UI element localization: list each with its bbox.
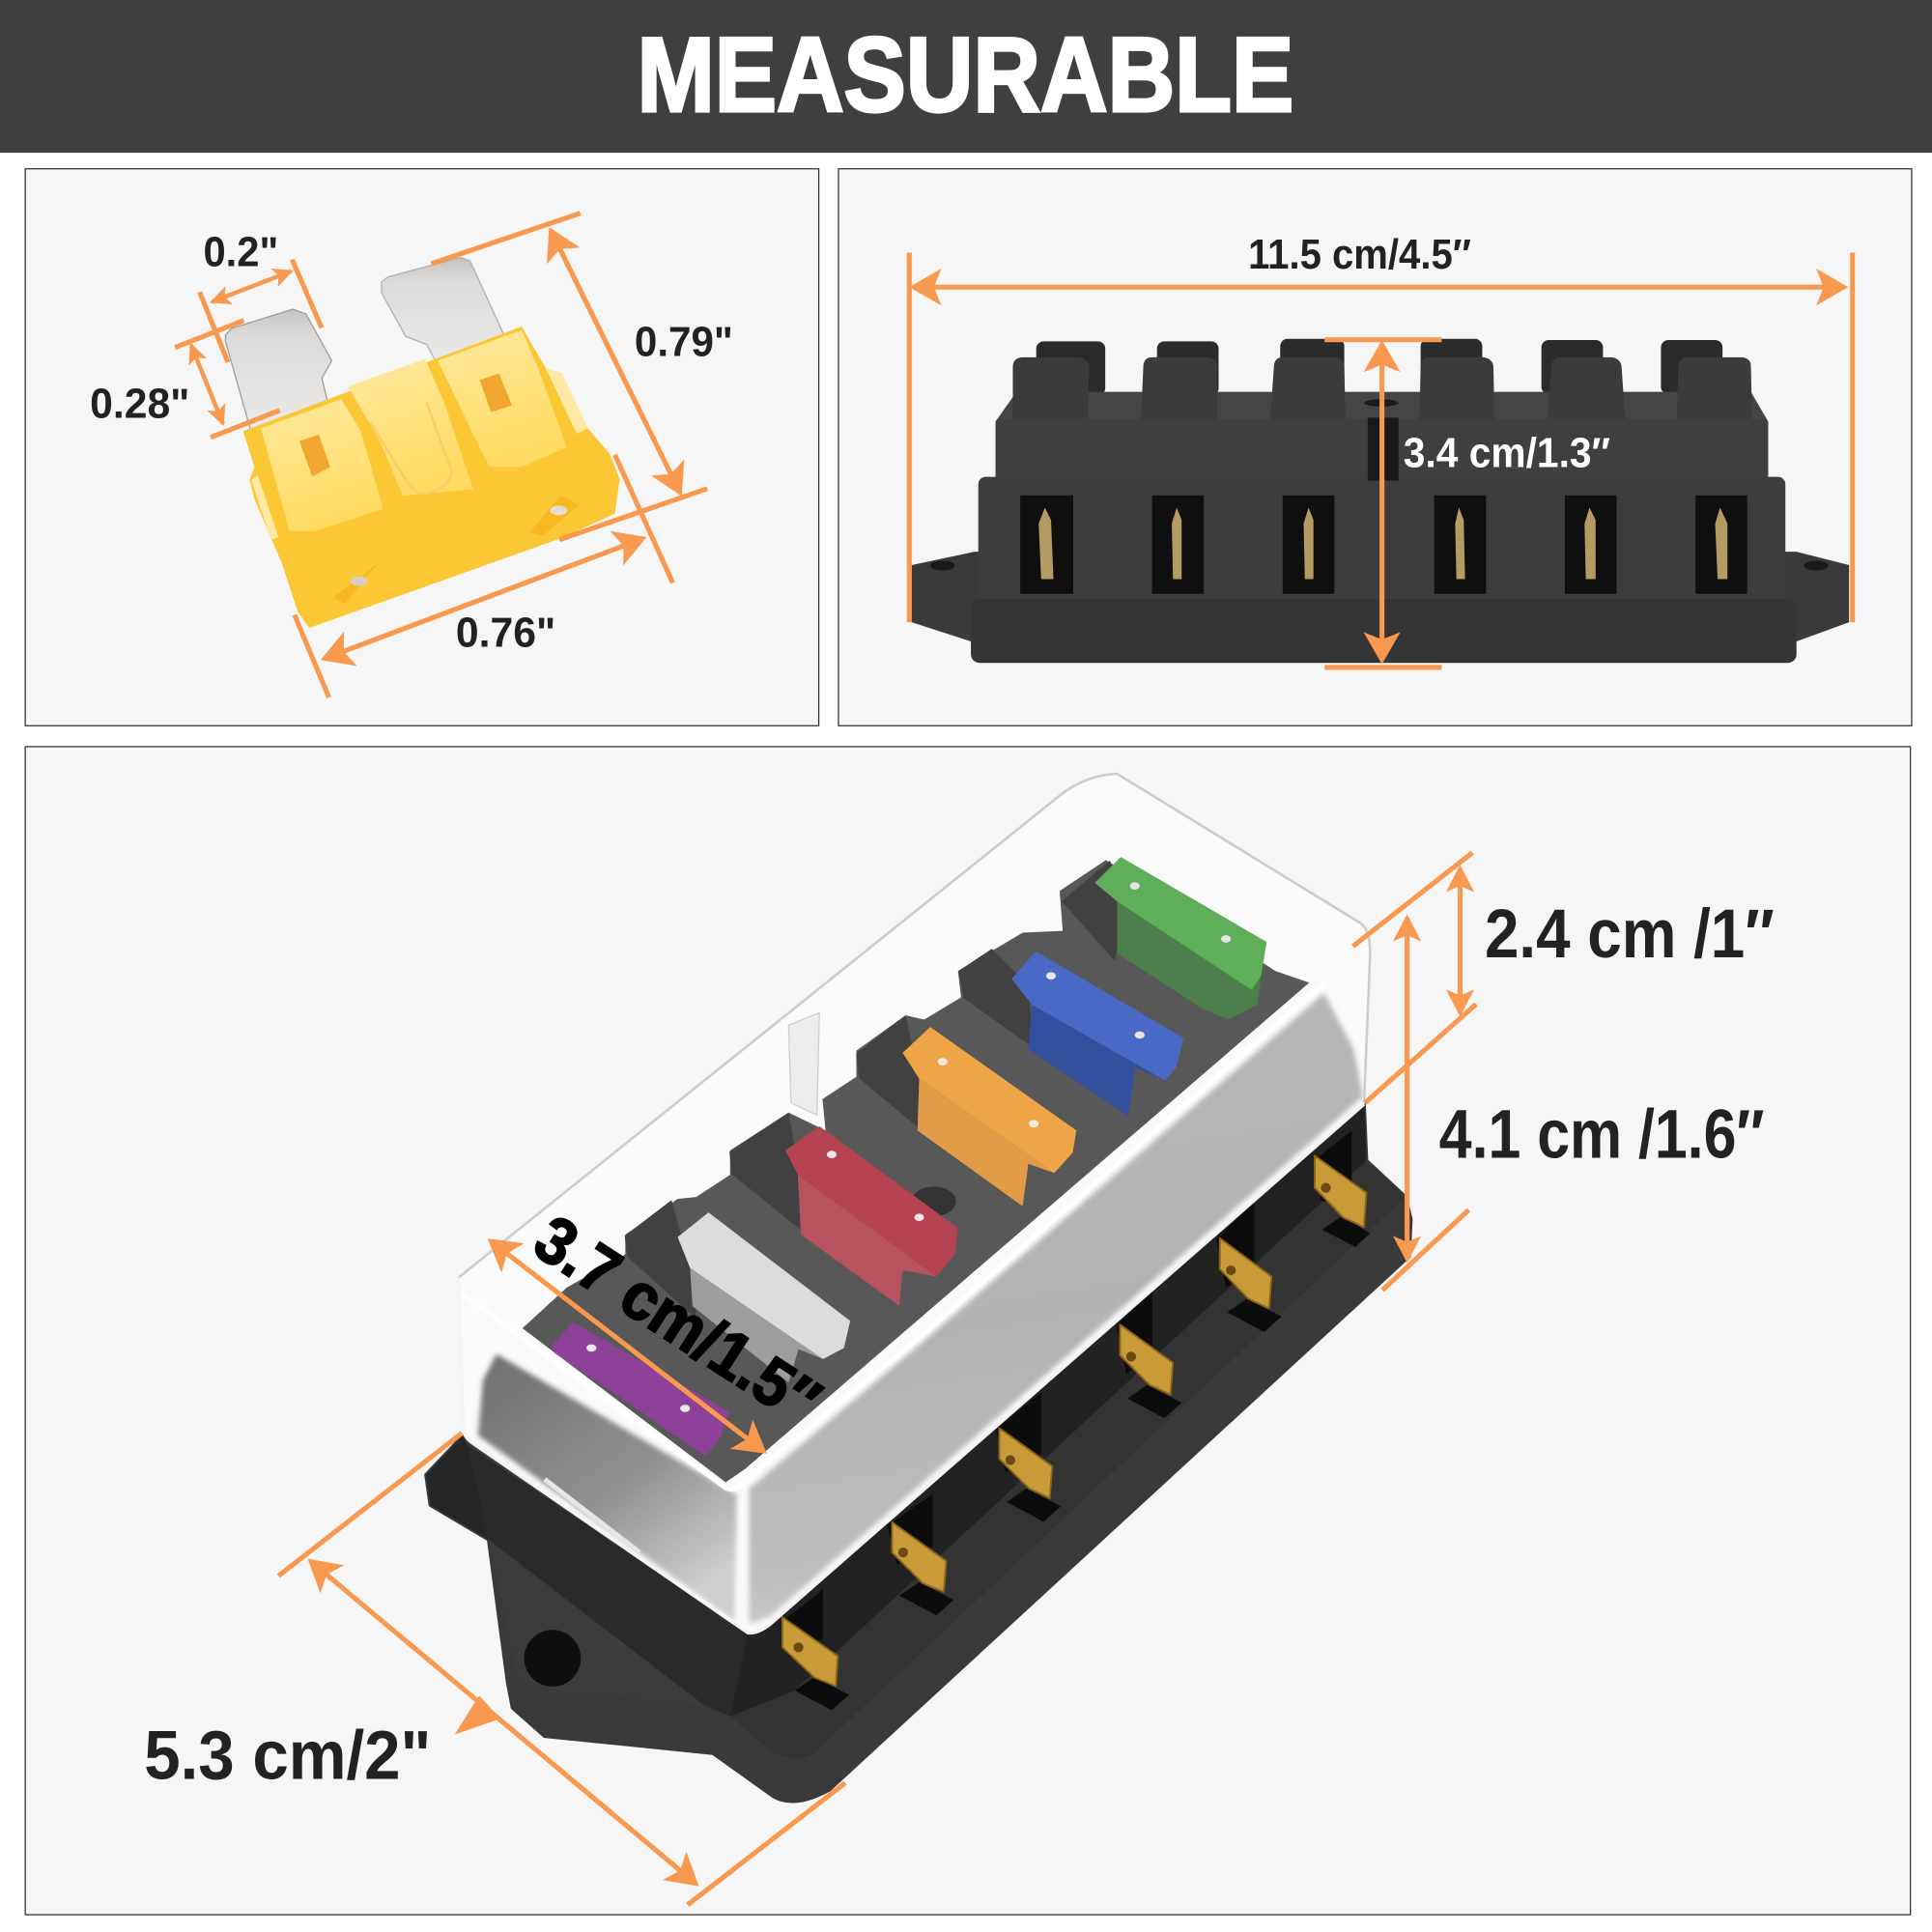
icon: purple fuse [552,1322,729,1457]
icon: green fuse [1094,857,1266,1019]
label: 0.76 inch: 0.76" [456,611,555,657]
title: MEASURABLE [637,16,1293,134]
label: 0.28 inch: 0.28" [90,381,189,427]
label: 2.4 cm: 2.4 cm /1″ [1485,895,1775,973]
panel: fuse box side view [838,169,1912,725]
label: width 11.5 cm: 11.5 cm/4.5″ [1248,232,1471,278]
dimension lines and arrows: perspective view [278,853,1476,1905]
label: 0.2 inch: 0.2" [203,229,278,275]
icon: blue fuse [1011,952,1183,1116]
dimension lines and arrows: fuse [175,213,707,697]
label: height 3.4 cm: 3.4 cm/1.3″ [1404,430,1610,476]
icon: red fuse [785,1126,958,1306]
icon: orange fuse [902,1027,1076,1207]
panel: single fuse dimensions [25,169,819,725]
icon: yellow blade fuse [225,258,620,628]
cover edge highlights [458,774,1370,1633]
header band [0,0,1932,153]
icon: white fuse [678,1212,850,1382]
label: 5.3 cm: 5.3 cm/2" [144,1718,431,1795]
label: 0.79 inch: 0.79" [635,320,733,366]
label: 3.7 cm: 3.7 cm/1.5″ [522,1201,833,1439]
icon: fuse box side view [912,339,1849,663]
panel: fuse box perspective view [25,747,1911,1915]
icon: clear cover [458,774,1370,1633]
dimension lines and arrows: side view [909,252,1853,668]
label: 4.1 cm: 4.1 cm /1.6″ [1439,1096,1765,1174]
icon: brass terminals [781,1130,1370,1710]
icon: fuse box base [426,1104,1410,1802]
